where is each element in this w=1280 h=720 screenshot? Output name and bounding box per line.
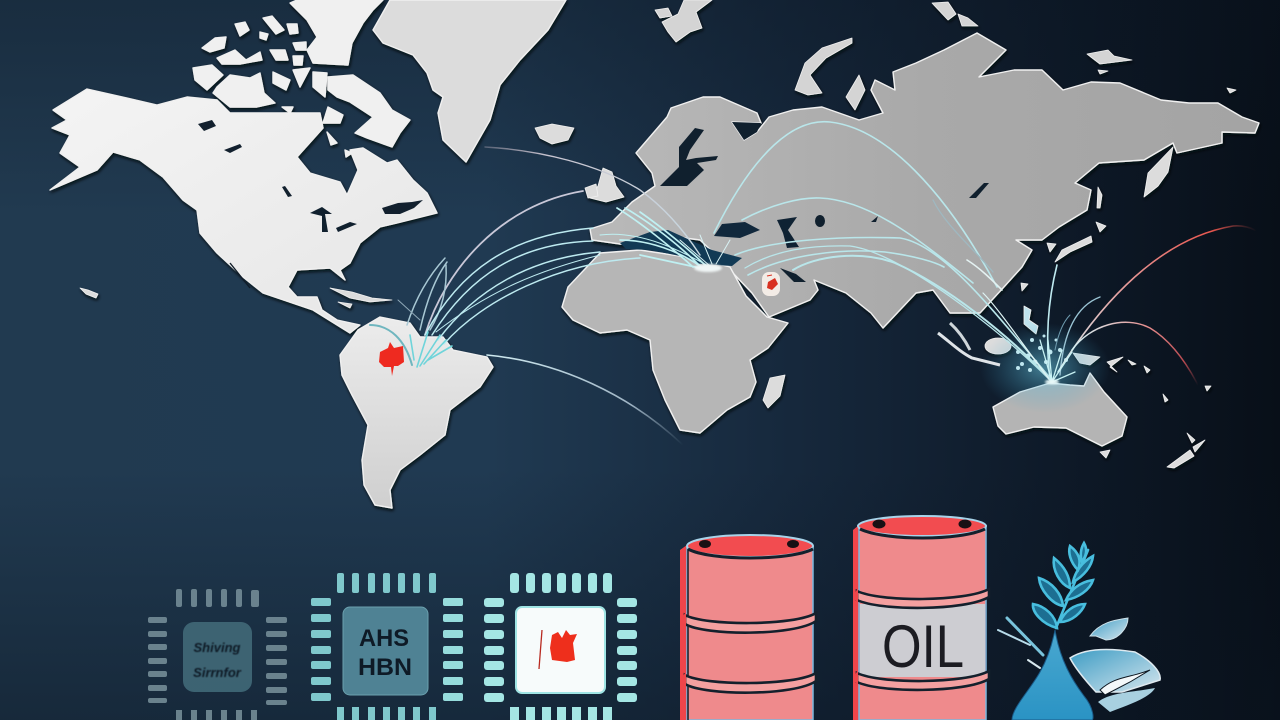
Baltic Sea (660, 128, 718, 186)
trade routes: South America to Europe (370, 147, 700, 445)
trade routes: Australia hub (1040, 226, 1255, 385)
archipelago particles (938, 323, 1068, 372)
barrel side shadow (853, 525, 859, 720)
continent: Australia (993, 373, 1127, 446)
White Sea (732, 122, 761, 140)
Gulf of Mexico shading (300, 274, 338, 282)
wheat (1033, 543, 1093, 628)
continent: Greenland (373, 0, 566, 162)
route from Greenland (485, 147, 700, 255)
chip pins (148, 589, 287, 720)
barrel top (687, 535, 813, 557)
chip icon: flag chip (484, 573, 637, 720)
chip body (343, 607, 428, 695)
ice pieces (1090, 618, 1128, 640)
Sumatra and Java chain (938, 333, 1000, 365)
Persian Gulf (780, 268, 806, 282)
barrel body (859, 526, 986, 720)
chip body (183, 622, 252, 692)
chip body (516, 607, 605, 693)
oil barrel: left (680, 535, 816, 720)
chip pins (484, 573, 637, 720)
barrel ribs (857, 589, 989, 690)
trade routes: Middle East to Asia (714, 122, 1052, 382)
continent: South America (340, 317, 493, 508)
chip label: Shiving (194, 640, 241, 655)
chip label: Sirrnfor (193, 665, 242, 680)
chip pins (311, 573, 463, 720)
flag mark (539, 630, 577, 669)
OIL label: OIL (882, 613, 964, 680)
marker: Saudi Arabia red flame (762, 272, 780, 296)
Gulf of St Lawrence (382, 200, 423, 214)
continent: Eurasia (590, 33, 1259, 328)
barrel ribs (685, 613, 816, 693)
glow: Australia hub (980, 323, 1110, 413)
Black Sea (714, 222, 760, 238)
continent: Arctic islands (193, 0, 410, 157)
Caspian Sea (777, 217, 799, 248)
Russian Arctic islands (655, 0, 1132, 110)
continent: North America (50, 89, 437, 333)
islands and small land masses (80, 88, 1236, 468)
dark inland water (198, 120, 989, 288)
chip icon: AHS HBN (311, 573, 463, 720)
chip icon: faded text chip (148, 589, 287, 720)
trade routes: Europe converge at Suez (600, 208, 730, 272)
marker: Colombia red flame (379, 342, 404, 376)
Baja strip (230, 263, 250, 288)
barrel body (687, 546, 813, 720)
oil barrel: right with OIL label (853, 516, 989, 720)
commodity icon: water drop with wheat and ice (998, 543, 1160, 720)
continent: Africa (562, 250, 788, 433)
chip label: HBN (358, 654, 412, 681)
route to Africa (487, 355, 683, 445)
chip label: AHS (359, 625, 409, 652)
sticks (998, 618, 1043, 668)
water drop (1012, 630, 1093, 720)
chip label (358, 625, 412, 681)
barrel top (858, 516, 986, 536)
barrel side shadow (680, 545, 687, 720)
chip label (193, 640, 242, 680)
Aral, Balkhash, Baikal (815, 215, 825, 227)
label band (860, 604, 985, 677)
Great Lakes (310, 207, 357, 232)
Canadian lakes (198, 120, 292, 197)
Mediterranean (620, 230, 742, 266)
world map (50, 0, 1259, 508)
